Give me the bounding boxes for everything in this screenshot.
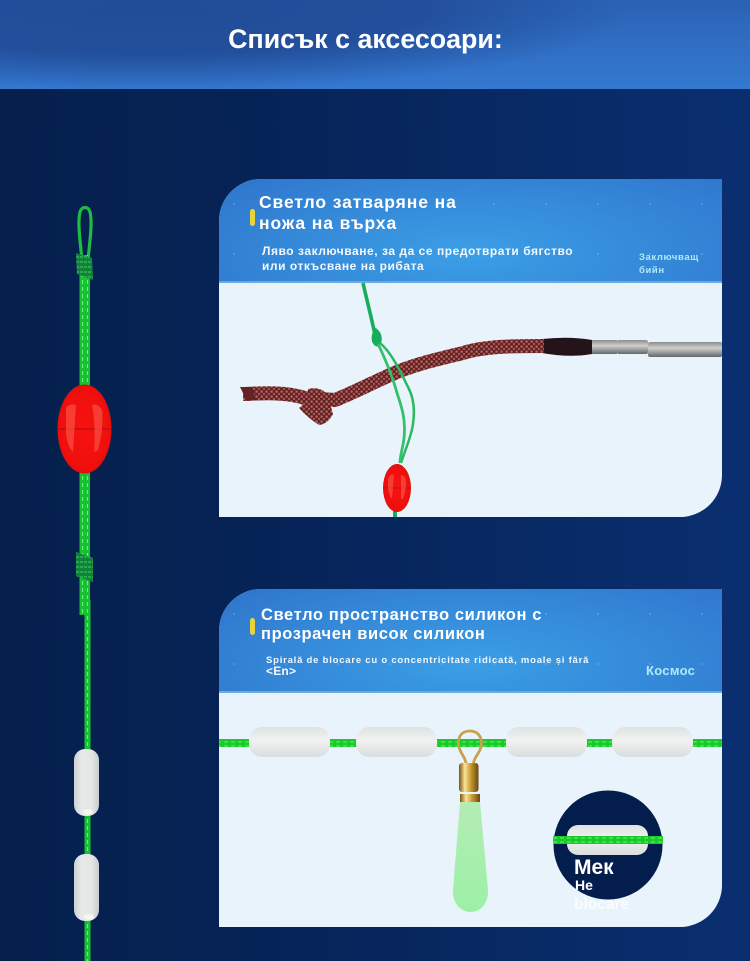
silicone tube 1 [249, 727, 330, 757]
green leader line with bead [363, 283, 414, 517]
line loop [79, 208, 91, 255]
swivel collar [460, 794, 480, 802]
inset circle: soft detail [553, 790, 663, 913]
swivel barrel [459, 763, 478, 792]
panel description: или откъсване на рибата [262, 259, 424, 273]
small red bead [383, 464, 411, 512]
left rig: full fishing line [58, 208, 112, 961]
panel description: Spirală de blocare cu o concentricitate ridicată, moale și fără [266, 655, 589, 666]
panel heading: Светло пространство силикон с [261, 606, 542, 624]
glow swivel sinker [453, 731, 488, 912]
metal tip sections [590, 340, 722, 357]
silicone tube 4 [612, 727, 693, 757]
silicone tube 2 [356, 727, 437, 757]
thick upper line [80, 255, 90, 615]
caption: space: Космос [646, 663, 695, 678]
panel heading: Светло затваряне на [259, 192, 457, 212]
panel header band [219, 179, 722, 283]
inset sublabel faded: blocare [574, 896, 630, 913]
yellow accent tick [250, 209, 255, 226]
swivel ring [458, 731, 482, 763]
upper knot wrap [76, 253, 93, 280]
dark ferrule [542, 338, 592, 356]
panel description: <En> [266, 664, 296, 678]
caption: locking bean: Заключващ [639, 252, 699, 263]
title: Списък с аксесоари: [228, 24, 503, 54]
panel description [262, 244, 573, 273]
header banner [0, 0, 750, 89]
inset sublabel: Не [575, 877, 593, 893]
panel heading [261, 606, 542, 643]
silicone tube lower [74, 854, 99, 921]
panel heading: прозрачен висок силикон [261, 625, 485, 643]
lower knot wrap [76, 552, 93, 582]
silicone tube upper [74, 749, 99, 816]
panel heading: ножа на върха [259, 213, 397, 233]
caption: locking bean [639, 252, 699, 276]
rod tip with braided rope [240, 338, 722, 425]
red bead [58, 384, 112, 474]
panel description [266, 655, 589, 678]
horizontal line with silicone tubes [219, 727, 722, 757]
panel description: Ляво заключване, за да се предотврати бягство [262, 244, 573, 258]
inset label: Мек [574, 856, 614, 879]
panel: silicone space [219, 589, 722, 927]
braided rope [243, 346, 544, 400]
panel heading [259, 192, 457, 233]
thin lower line [84, 600, 90, 961]
silicone tube 3 [506, 727, 587, 757]
glow drop [453, 802, 488, 912]
yellow accent tick [250, 618, 255, 635]
rope knot [299, 388, 333, 425]
panel header band [219, 589, 722, 693]
caption: locking bean: бийн [639, 265, 665, 276]
rope cut end [240, 387, 256, 401]
panel: tip knife closure [219, 179, 722, 517]
